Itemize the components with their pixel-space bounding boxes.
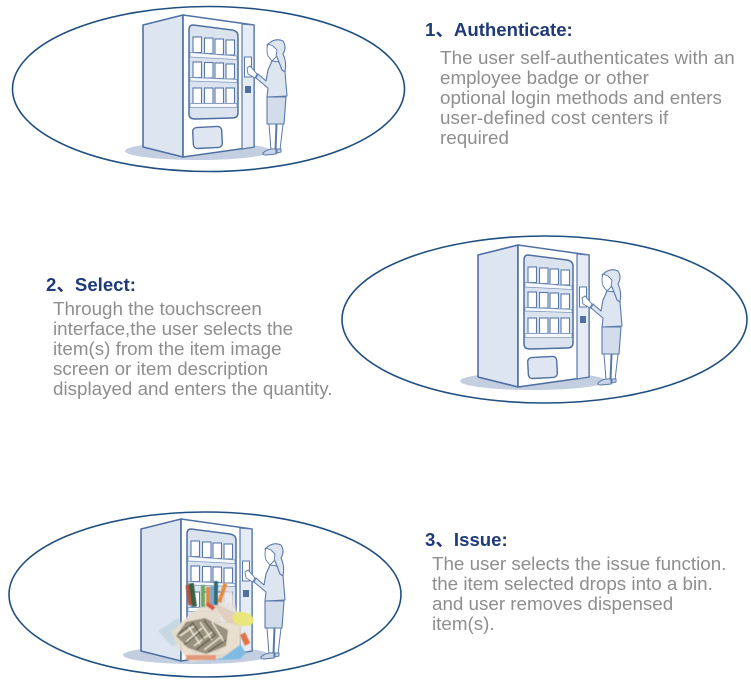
illustration: machine and user [125, 15, 287, 160]
step 1 description: optional login methods and enters [440, 87, 722, 108]
step 1 description: employee badge or other [440, 67, 649, 88]
scene 2: vending machine in ellipse [342, 236, 747, 403]
step 2 description: displayed and enters the quantity. [53, 378, 332, 399]
step 2 description: Through the touchscreen [53, 298, 262, 319]
step 3 description: the item selected drops into a bin. [432, 573, 713, 594]
step 2 description: interface,the user selects the [53, 318, 293, 339]
illustration: pile of dispensed items [158, 581, 255, 662]
step 3 description: The user selects the issue function. [432, 553, 726, 574]
scene 3: vending machine with items in ellipse [9, 512, 401, 677]
step 2 heading: 2、Select: [46, 274, 136, 295]
illustration: machine and user [460, 245, 622, 390]
ellipse 1 [12, 6, 404, 172]
ellipse 2 [342, 236, 747, 403]
ellipse 3 [9, 512, 401, 677]
step 1 heading: 1、Authenticate: [425, 19, 573, 40]
step 3 heading: 3、Issue: [425, 529, 508, 550]
step 1 description: The user self-authenticates with an [440, 47, 735, 68]
step 2 description: screen or item description [53, 358, 268, 379]
step 3 description: and user removes dispensed [432, 593, 673, 614]
step 3 description: item(s). [432, 613, 495, 634]
illustration: machine and user [123, 519, 285, 664]
step 1 description: required [440, 127, 509, 148]
scene 1: vending machine in ellipse [12, 6, 404, 172]
step 2 description: item(s) from the item image [53, 338, 282, 359]
step 1 description: user-defined cost centers if [440, 107, 669, 128]
